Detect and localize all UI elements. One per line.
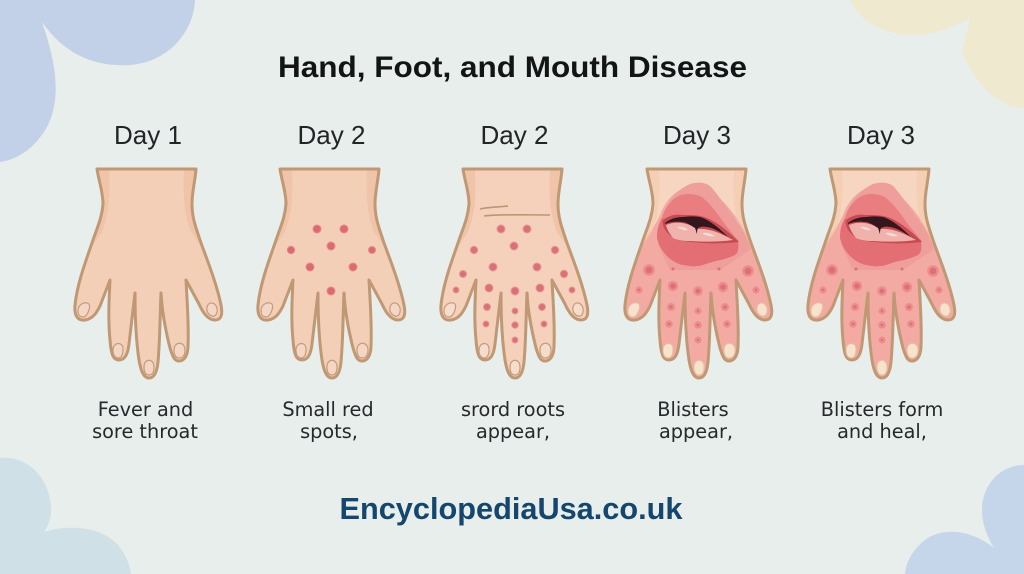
caption: day 3 second: and heal, — [837, 420, 927, 443]
heading: day 2: Day 2 — [298, 120, 365, 150]
caption: day 2: Small red — [282, 398, 374, 421]
mouth sore — [840, 183, 933, 270]
heading: day 3: Day 3 — [663, 120, 731, 150]
caption: day 3: appear, — [659, 420, 733, 443]
caption: day 1: sore throat — [92, 420, 198, 443]
small dots — [854, 268, 904, 270]
blisters — [821, 265, 941, 342]
footer brand: EncyclopediaUsa.co.uk — [340, 491, 683, 526]
decorative corner blob: top right — [851, 0, 1024, 108]
heading: day 2 second: Day 2 — [481, 120, 548, 150]
red spots — [287, 225, 376, 295]
hand: spreading spots — [441, 169, 588, 378]
decorative corner blob: bottom right — [905, 465, 1024, 574]
caption: day 2: spots, — [300, 420, 358, 443]
decorative corner blob: top left — [0, 0, 195, 162]
caption: day 2 second: srord roots — [461, 398, 565, 421]
hand: blisters healing with mouth sore — [808, 169, 955, 378]
heading: day 3 second: Day 3 — [847, 120, 915, 150]
blisters — [637, 265, 758, 342]
caption: day 3 second: Blisters form — [821, 398, 943, 421]
title: Hand, Foot, and Mouth Disease — [278, 51, 747, 84]
mouth sore — [657, 183, 750, 270]
hand: blisters with mouth sore — [625, 169, 772, 378]
wrist creases — [480, 206, 550, 216]
decorative corner blob: bottom left — [0, 458, 131, 574]
heading: day 1: Day 1 — [114, 120, 182, 150]
stage: day 2 small spots — [258, 120, 405, 443]
stage: day 1 — [75, 120, 222, 443]
small dots — [672, 268, 720, 270]
stage: day 3 heal — [808, 120, 955, 443]
stage: day 3 blisters — [625, 120, 772, 443]
stage: day 2 roots — [441, 120, 588, 443]
caption: day 1: Fever and — [98, 398, 193, 421]
hand: small spots — [258, 169, 405, 378]
red spots — [453, 225, 575, 343]
caption: day 3: Blisters — [657, 398, 729, 421]
hand: healthy — [75, 169, 222, 378]
caption: day 2 second: appear, — [476, 420, 550, 443]
